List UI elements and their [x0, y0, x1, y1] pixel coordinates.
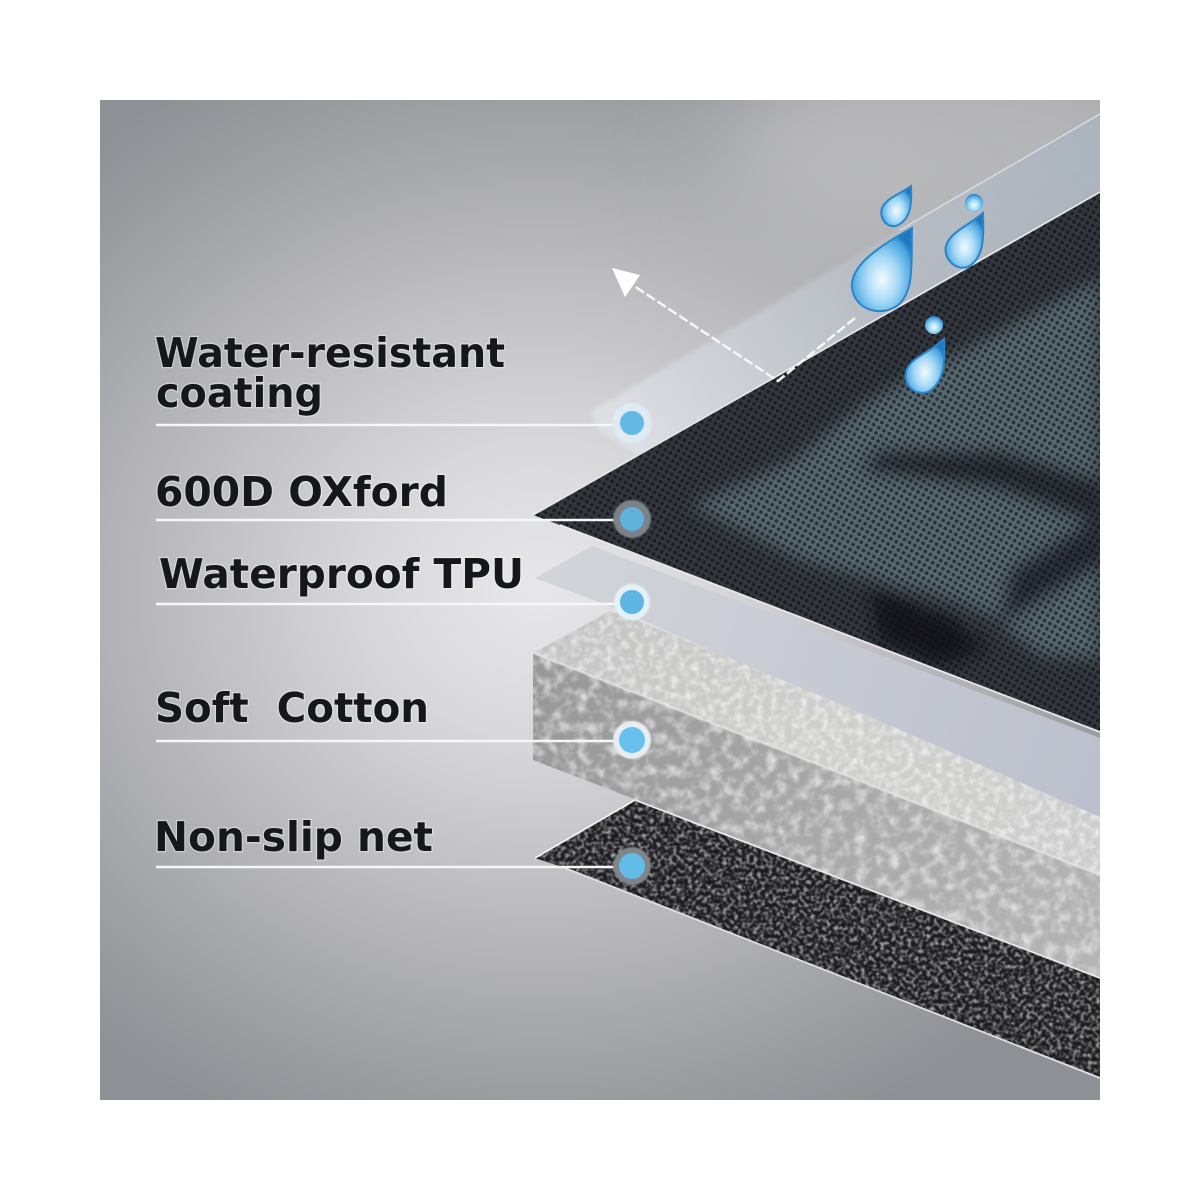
layer: waterproof TPU sheet: [535, 546, 1100, 817]
layer: water-resistant coating sheet: [590, 112, 1100, 456]
cotton top surface: [533, 610, 1100, 875]
cotton side face: [533, 653, 1100, 978]
label: 600D OXford: 600D OXford: [155, 468, 448, 516]
arrow: water deflected off surface: [612, 268, 855, 381]
marker: coating: [612, 403, 652, 443]
icon: small drop above large: [881, 186, 911, 226]
icon: right small drop: [965, 194, 983, 212]
layer: non-slip net: [530, 798, 1105, 1083]
label: Water-resistant coating: coating: [156, 369, 323, 417]
background panel: [100, 100, 1100, 1100]
icon: lower drop: [906, 339, 944, 393]
label: Soft Cotton: Soft Cotton: [155, 684, 429, 732]
leader lines: [156, 425, 618, 867]
layer: soft cotton padding: [530, 600, 1105, 980]
label: Non-slip net: Non-slip net: [154, 813, 433, 861]
marker: oxford: [613, 500, 651, 538]
marker: net: [613, 847, 651, 885]
marker: tpu: [614, 584, 650, 620]
icon: large drop: [852, 228, 912, 311]
icon: right drop: [946, 213, 983, 268]
layer: 600D Oxford fabric: [533, 192, 1100, 732]
marker: cotton: [613, 721, 651, 759]
label: Water-resistant coating: Water-resistant: [155, 329, 505, 377]
label: Water-resistant coating: [155, 329, 505, 417]
label: Waterproof TPU: Waterproof TPU: [159, 550, 524, 598]
icon: water drops: [852, 186, 983, 393]
icon: lower small drop: [925, 316, 943, 334]
